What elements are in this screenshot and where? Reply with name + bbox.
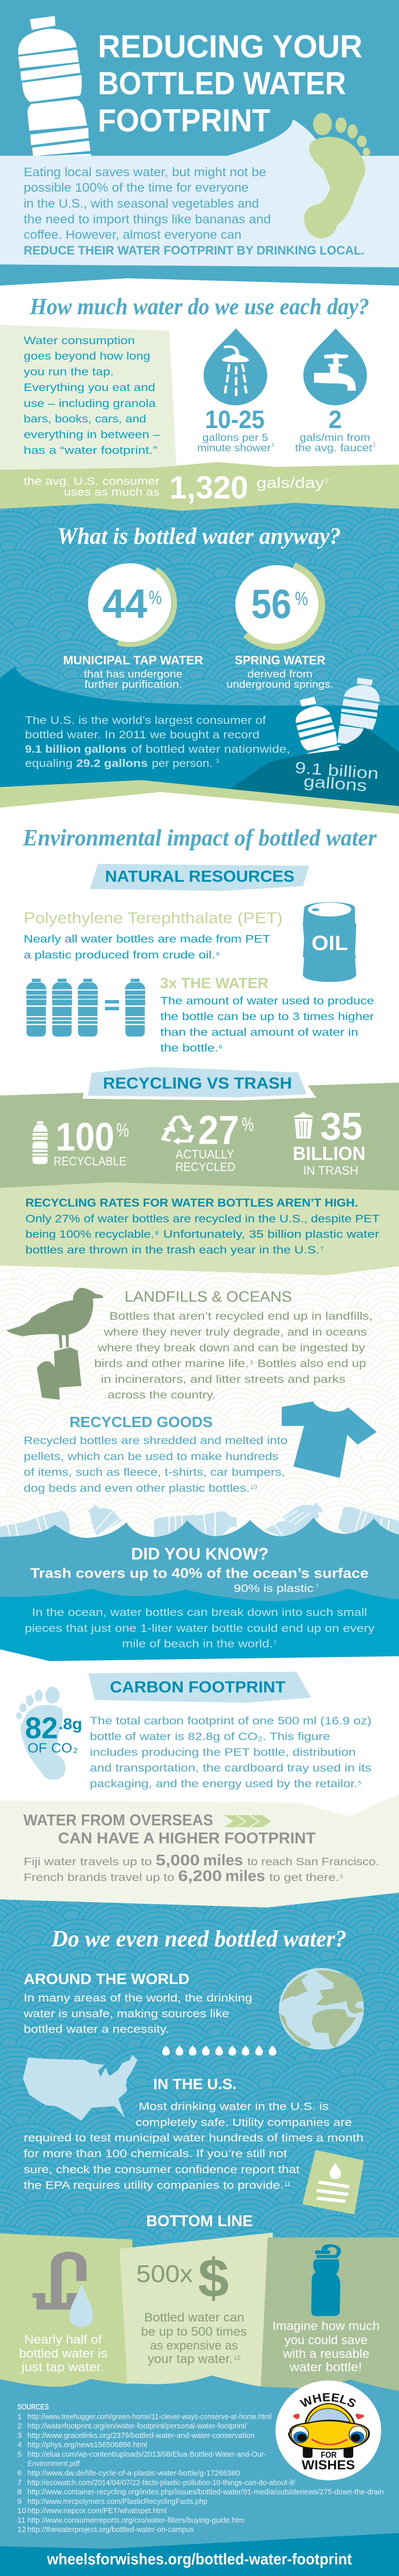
consumption text: Everything you eat and <box>24 381 155 394</box>
did you know heading: Trash covers up to 40% of the ocean’s surface <box>30 1565 369 1581</box>
band: 1,320 gallons per day: the avg. U.S. consumer <box>24 475 160 487</box>
panel: recycling rates: 9 <box>155 1230 159 1236</box>
panel: bottom line cost: your tap water. <box>148 2352 233 2366</box>
stat: 35 billion in trash: 35 <box>320 1105 362 1148</box>
callout: 9.1 billion gallons: 9.1 billion <box>294 758 379 783</box>
footer <box>0 2533 399 2576</box>
panel: recycling rates: Unfortunately, 35 billion plastic water <box>163 1228 379 1241</box>
block: in the US: completely safe. Utility companies are <box>136 2116 352 2128</box>
stat: shower gallons <box>197 405 274 454</box>
icon: carbon footprint with figure <box>16 1687 82 1780</box>
consumption text: 3 <box>216 758 219 764</box>
logo: wheels for wishes: WISHES <box>302 2459 355 2472</box>
chart: 56 percent spring <box>235 565 322 647</box>
sources list: 2 <box>18 2422 22 2431</box>
label: spring water <box>227 654 333 690</box>
block: landfills and oceans: 3 <box>250 1360 253 1366</box>
overseas text <box>24 1852 379 1885</box>
stat: faucet gallons: the avg. faucet <box>295 442 372 454</box>
label: spring water: underground springs. <box>227 679 333 690</box>
block: landfills and oceans: in incinerators, and litter streets and parks <box>101 1372 345 1385</box>
banner: natural resources <box>90 864 309 891</box>
block: 3x the water: the bottle. <box>160 1041 218 1054</box>
overseas text: to get there. <box>269 1871 339 1884</box>
sources list: http://ecowatch.com/2014/04/07/22-facts-plastic-pollution-10-things-can-do-about-it/ <box>27 2479 296 2487</box>
stat: faucet gallons: 1 <box>373 442 376 448</box>
did you know heading: 7 <box>316 1583 319 1589</box>
block: recycled goods: Recycled bottles are shredded and melted into <box>24 1434 288 1447</box>
consumption text: everything in between – <box>24 428 161 440</box>
block: landfills and oceans: where they never truly degrade, and in oceans <box>103 1326 367 1338</box>
sources list: 10 <box>18 2507 26 2515</box>
block: recycled goods: dog beds and even other plastic bottles. <box>24 1482 250 1494</box>
stat: faucet gallons: 2 <box>328 405 342 433</box>
block: landfills and oceans <box>94 1289 373 1401</box>
block: 3x the water: 3x THE WATER <box>160 976 268 992</box>
sources list: http://www.container-recycling.org/index.php/issues/bottled-water/91-media/outsidenews/275-down-the-drain <box>27 2488 384 2497</box>
icon: row of drops <box>162 2045 276 2056</box>
icon: report document <box>302 2150 364 2214</box>
block: landfills and oceans: Bottles that aren’t recycled end up in landfills, <box>109 1310 373 1323</box>
panel: bottom line reusable bottle: water bottle! <box>289 2361 362 2374</box>
panel: bottom line cost: Bottled water can <box>144 2311 244 2325</box>
stat: 27 percent recycled <box>163 1107 254 1174</box>
overseas text: 5,000 <box>155 1852 200 1869</box>
carbon text: The total carbon footprint of one 500 ml (16.9 oz) <box>90 1714 371 1727</box>
sources list: http://www.treehugger.com/green-home/11-clever-ways-conserve-at-home.html <box>27 2413 271 2421</box>
stat: 27 percent recycled: 27 <box>198 1107 239 1153</box>
panel: recycling rates: Only 27% of water bottles are recycled in the U.S., despite PET <box>25 1212 380 1225</box>
panel: bottom line tap water: bottled water is <box>19 2347 108 2361</box>
overseas text: to reach San Francisco. <box>247 1855 379 1868</box>
consumption text <box>25 714 290 769</box>
panel: bottom line reusable bottle: with a reusable <box>283 2347 370 2361</box>
block: in the US: required to test municipal water hundreds of times a month <box>24 2131 363 2144</box>
sources list: 1 <box>18 2413 22 2421</box>
band: 1,320 gallons per day: 1,320 <box>169 469 248 505</box>
overseas heading: WATER FROM OVERSEAS <box>23 1811 213 1829</box>
icon: faucet drop <box>303 328 367 405</box>
block: landfills and oceans: birds and other marine life. <box>94 1357 249 1369</box>
sources list: http://www.mrcpolymers.com/PlasticRecyclingFacts.php <box>27 2497 207 2506</box>
title: REDUCING YOUR <box>98 28 362 64</box>
block: in the US: the EPA requires utility companies to provide. <box>24 2179 284 2191</box>
panel: bottom line cost: 12 <box>234 2354 240 2361</box>
stat: shower gallons: 10-25 <box>205 405 265 433</box>
sources list: http://www.napcor.com/PET/whatispet.html <box>27 2507 167 2515</box>
consumption text: you run the tap. <box>24 365 114 378</box>
block: recycled goods: 10 <box>250 1484 257 1490</box>
label: municipal tap water: further purification. <box>84 679 182 690</box>
sources list: http://www.consumerreports.org/cro/water-filters/buying-guide.htm <box>27 2516 244 2524</box>
block: in the US: for more than 100 chemicals. If you’re still not <box>24 2147 287 2160</box>
heading: bottom line: BOTTOM LINE <box>146 2212 253 2230</box>
did you know heading: DID YOU KNOW? <box>131 1545 269 1564</box>
stat: 100 percent recyclable: RECYCLABLE <box>54 1155 127 1168</box>
intro text: REDUCE THEIR WATER FOOTPRINT BY DRINKING LOCAL. <box>24 244 365 258</box>
logo: wheels for wishes <box>275 2380 381 2480</box>
carbon text: 5 <box>358 1780 361 1786</box>
sources list: http://www.gracelinks.org/2379/bottled-water-and-water-conservation <box>27 2431 254 2440</box>
icon: three bottles equal one <box>26 979 145 1037</box>
block: PET: Polyethylene Terephthalate (PET) <box>24 909 283 927</box>
ocean text: In the ocean, water bottles can break down into such small <box>32 1606 367 1618</box>
intro text: coffee. However, almost everyone can <box>24 228 241 242</box>
consumption text: 9.1 billion gallons <box>25 742 127 755</box>
overseas text: miles <box>203 1852 243 1869</box>
intro text: the need to import things like bananas and <box>24 213 271 226</box>
icon: chevrons <box>224 1815 271 1827</box>
stat: 35 billion in trash: IN TRASH <box>303 1164 358 1178</box>
panel: header <box>0 0 399 308</box>
consumption text: goes beyond how long <box>24 350 150 362</box>
logo: wheels for wishes: FOR <box>321 2450 337 2460</box>
chart: 56 percent spring: % <box>295 588 308 609</box>
block: landfills and oceans: where they break down and can be ingested by <box>97 1342 366 1354</box>
consumption text: Water consumption <box>24 334 135 347</box>
carbon text: and transportation, the cardboard tray used in its <box>90 1761 371 1774</box>
consumption text <box>24 334 161 456</box>
consumption text: use – including granola <box>24 397 156 410</box>
panel: recycling rates: bottles are thrown in the trash each year in the U.S. <box>25 1244 319 1256</box>
sources list: 12 <box>18 2526 26 2534</box>
icon: oil barrel <box>303 902 356 982</box>
banner heading: RECYCLING VS TRASH <box>103 1074 292 1092</box>
footer: wheelsforwishes.org/bottled-water-footprint <box>46 2550 352 2568</box>
stat: 35 billion in trash: BILLION <box>292 1144 366 1164</box>
block: around the world <box>23 1972 252 2036</box>
overseas text: 6,200 <box>178 1868 222 1885</box>
panel: water consumption <box>0 325 177 470</box>
stat: 100 percent recyclable: % <box>116 1120 129 1141</box>
block: PET: 6 <box>216 951 220 957</box>
panel: bottom line reusable bottle: Imagine how much <box>272 2319 379 2333</box>
ocean text: 7 <box>273 1639 277 1646</box>
chart: 56 percent spring: 56 <box>251 581 291 627</box>
block: around the world: In many areas of the world, the drinking <box>24 1992 252 2004</box>
wave pattern background: do we need bottled water <box>0 1887 399 2369</box>
sources list: 7 <box>18 2479 22 2487</box>
panel: US consumption <box>0 666 399 806</box>
sources list <box>18 2402 384 2534</box>
panel: bottom line cost: as expensive as <box>150 2339 238 2353</box>
consumption text: has a “water footprint.” <box>24 444 157 456</box>
sources list: 8 <box>18 2488 22 2497</box>
stat: shower gallons: gallons per 5 <box>202 432 268 444</box>
icon: shower drop <box>203 328 267 405</box>
title <box>98 28 362 139</box>
carbon text: bottle of water is 82.8g of CO₂. This figure <box>90 1730 330 1742</box>
heading: do we even need bottled water: Do we even need bottled water? <box>51 1926 346 1952</box>
light intro panel <box>0 119 399 267</box>
overseas text: Fiji water travels up to <box>24 1855 152 1868</box>
chart: 44 percent municipal: 44 <box>102 580 147 626</box>
stat: shower gallons: 1 <box>271 442 274 448</box>
block: landfills and oceans: across the country. <box>108 1388 216 1401</box>
block: around the world: bottled water a necessity. <box>24 2023 169 2036</box>
icon: t-shirt <box>282 1401 377 1478</box>
divider: green stripe <box>0 780 399 814</box>
label: spring water: SPRING WATER <box>235 654 325 667</box>
chart: 44 percent municipal <box>88 563 175 645</box>
callout: 9.1 billion gallons: gallons <box>303 772 368 795</box>
panel: recycling vs trash <box>0 1067 399 1192</box>
block: recycled goods: RECYCLED GOODS <box>70 1415 213 1431</box>
consumption text: The U.S. is the world’s largest consumer of <box>25 714 266 726</box>
carbon text <box>90 1714 371 1790</box>
panel: bottom line cost: be up to 500 times <box>141 2325 247 2338</box>
wave pattern background: what is bottled water <box>0 501 399 715</box>
icon: carbon footprint with figure: OF CO <box>27 1740 72 1755</box>
block: recycled goods <box>24 1415 288 1494</box>
panel: bottom line tap water: Nearly half of <box>24 2333 102 2347</box>
icon: plastic bottle <box>18 16 91 156</box>
ocean text: mile of beach in the world. <box>122 1637 273 1650</box>
icon: reusable bottle <box>311 2244 341 2316</box>
stat: faucet gallons: gals/min from <box>300 432 370 444</box>
overseas heading <box>23 1811 316 1847</box>
stat: 27 percent recycled: ACTUALLY <box>176 1148 234 1161</box>
title: BOTTLED WATER <box>98 65 346 101</box>
heading: what is bottled water: What is bottled water anyway? <box>57 523 341 549</box>
block: in the US: sure, check the consumer confidence report that <box>24 2163 300 2176</box>
icon: seagull on post <box>6 1288 103 1400</box>
panel: bottom line cost: 500x <box>136 2261 193 2287</box>
block: in the US: Most drinking water in the U.S. is <box>138 2100 328 2112</box>
sources list: 4 <box>18 2441 22 2449</box>
ocean text: pieces that just one 1-liter water bottle could end up on every <box>25 1622 375 1634</box>
panel: recycling rates: being 100% recyclable. <box>25 1228 154 1241</box>
sources list: 5 <box>18 2450 22 2459</box>
panel: bottom line tap water: just tap water. <box>21 2361 104 2374</box>
icon: oil barrel: OIL <box>311 931 348 955</box>
icon: dollar sign: $ <box>198 2248 229 2309</box>
stat: 100 percent recyclable: 100 <box>56 1114 114 1159</box>
white cut below header <box>0 278 399 308</box>
sources list: Environment.pdf <box>27 2460 80 2468</box>
sources list: http://elua.com/wp-content/uploads/2013/08/Elua-Bottled-Water-and-Our- <box>27 2450 266 2459</box>
block: PET: Nearly all water bottles are made from PET <box>24 933 270 945</box>
intro text: in the U.S., with seasonal vegetables and <box>24 197 259 211</box>
icon: carbon footprint with figure: 2 <box>73 1747 78 1755</box>
panel: water from overseas <box>0 1794 399 1907</box>
sources list: 3 <box>18 2431 22 2440</box>
stat: 35 billion in trash <box>292 1105 366 1178</box>
panel: recycling rates <box>0 1182 399 1275</box>
block: PET: a plastic produced from crude oil. <box>24 948 215 961</box>
block: 3x the water <box>160 976 374 1054</box>
block: landfills and oceans: LANDFILLS & OCEANS <box>125 1289 292 1305</box>
block: 3x the water: than the actual amount of water in <box>160 1026 358 1038</box>
consumption text: bars, books, cars, and <box>24 413 146 425</box>
stat: faucet gallons <box>295 405 376 454</box>
overseas text: 5 <box>340 1873 343 1880</box>
sources list: http://www.dw.de/life-cycle-of-a-plastic-water-bottle/g-17266360 <box>27 2469 240 2478</box>
ocean text <box>25 1606 375 1650</box>
banner: carbon footprint: CARBON FOOTPRINT <box>110 1678 286 1696</box>
consumption text: bottled water. In 2011 we bought a record <box>25 728 259 741</box>
icon: car <box>289 2403 369 2458</box>
sources list: SOURCES <box>18 2402 49 2412</box>
label: spring water: derived from <box>247 668 313 680</box>
block: around the world: AROUND THE WORLD <box>24 1972 189 1988</box>
consumption text: equaling <box>25 757 73 769</box>
chart: 44 percent municipal: % <box>149 587 162 608</box>
panel: bottom line reusable bottle <box>261 2238 399 2391</box>
carbon text: includes producing the PET bottle, distribution <box>90 1746 356 1758</box>
consumption text: of bottled water nationwide, <box>131 742 290 755</box>
wave pattern background: landfills <box>0 1260 399 1547</box>
panel: sources background <box>0 2349 399 2576</box>
overseas text: miles <box>225 1868 265 1885</box>
sources list: http://thewaterproject.org/bottled-water-on-campus <box>27 2526 194 2534</box>
block: around the world: water is unsafe, making sources like <box>23 2007 229 2020</box>
band: 1,320 gallons per day: gals/day <box>256 475 324 492</box>
block: recycled goods: pellets, which can be used to make hundreds <box>24 1450 279 1463</box>
icon: bottles <box>230 677 399 806</box>
panel: bottom line reusable bottle: you could save <box>285 2334 368 2347</box>
logo: wheels for wishes: WHEELS <box>300 2393 356 2407</box>
panel: recycling rates: 7 <box>320 1246 324 1252</box>
illustration: floating bottles <box>0 1502 399 1537</box>
icon: green footprint <box>304 113 370 239</box>
did you know heading <box>30 1545 369 1595</box>
overseas heading: CAN HAVE A HIGHER FOOTPRINT <box>58 1829 316 1847</box>
sources list: http://phys.org/news156506896.html <box>27 2441 147 2449</box>
carbon text: packaging, and the energy used by the retailor. <box>90 1777 357 1790</box>
stat: shower gallons: minute shower <box>197 442 271 454</box>
banner: carbon footprint <box>89 1672 311 1703</box>
stat: 27 percent recycled: % <box>242 1114 254 1136</box>
consumption text: 29.2 gallons <box>76 757 148 769</box>
block: 3x the water: The amount of water used to produce <box>160 994 374 1007</box>
intro text <box>24 165 365 258</box>
stat: 27 percent recycled: RECYCLED <box>176 1161 235 1174</box>
block: PET <box>24 909 283 961</box>
sources list: 6 <box>18 2469 22 2478</box>
callout: 9.1 billion gallons <box>294 758 379 795</box>
sources list: http://waterfootprint.org/en/water-footprint/personal-water-footprint/ <box>27 2422 247 2431</box>
band: 1,320 gallons per day <box>0 462 399 511</box>
icon: carbon footprint with figure: .8g <box>59 1715 82 1733</box>
icon: sink faucet <box>32 2251 93 2327</box>
block: 3x the water: the bottle can be up to 3 times higher <box>160 1010 374 1023</box>
title: FOOTPRINT <box>98 103 270 139</box>
stat: 100 percent recyclable <box>32 1114 129 1168</box>
block: recycled goods: of items, such as fleece, t-shirts, car bumpers, <box>24 1466 285 1478</box>
icon: US map <box>23 2055 137 2121</box>
panel: did you know <box>0 1518 399 1661</box>
label: municipal tap water: MUNICIPAL TAP WATER <box>63 654 203 667</box>
consumption text: per person. <box>152 757 213 769</box>
block: 3x the water: 6 <box>219 1044 222 1050</box>
panel: bottom line cost <box>119 2232 273 2386</box>
label: municipal tap water <box>63 654 203 690</box>
intro text: possible 100% of the time for everyone <box>24 181 249 195</box>
overseas text: French brands travel up to <box>24 1871 175 1884</box>
panel: bottom line tap water <box>0 2233 132 2387</box>
band: 1,320 gallons per day: 2 <box>325 477 329 485</box>
block: in the US <box>24 2077 363 2191</box>
block: in the US: IN THE U.S. <box>153 2077 237 2093</box>
icon: carbon footprint with figure: 82 <box>25 1711 58 1745</box>
sources list: 9 <box>18 2497 22 2506</box>
label: municipal tap water: that has undergone <box>84 668 182 680</box>
band: 1,320 gallons per day: uses as much as <box>64 486 160 498</box>
did you know heading: 90% is plastic <box>234 1582 314 1595</box>
intro text: Eating local saves water, but might not be <box>24 165 266 179</box>
block: landfills and oceans: Bottles also end up <box>257 1357 366 1369</box>
icon: globe <box>279 1968 364 2049</box>
banner: natural resources: NATURAL RESOURCES <box>105 868 294 885</box>
block: in the US: 11 <box>284 2181 290 2188</box>
panel: recycling rates: RECYCLING RATES FOR WATER BOTTLES AREN’T HIGH. <box>25 1196 358 1209</box>
sources list: 11 <box>18 2516 26 2524</box>
